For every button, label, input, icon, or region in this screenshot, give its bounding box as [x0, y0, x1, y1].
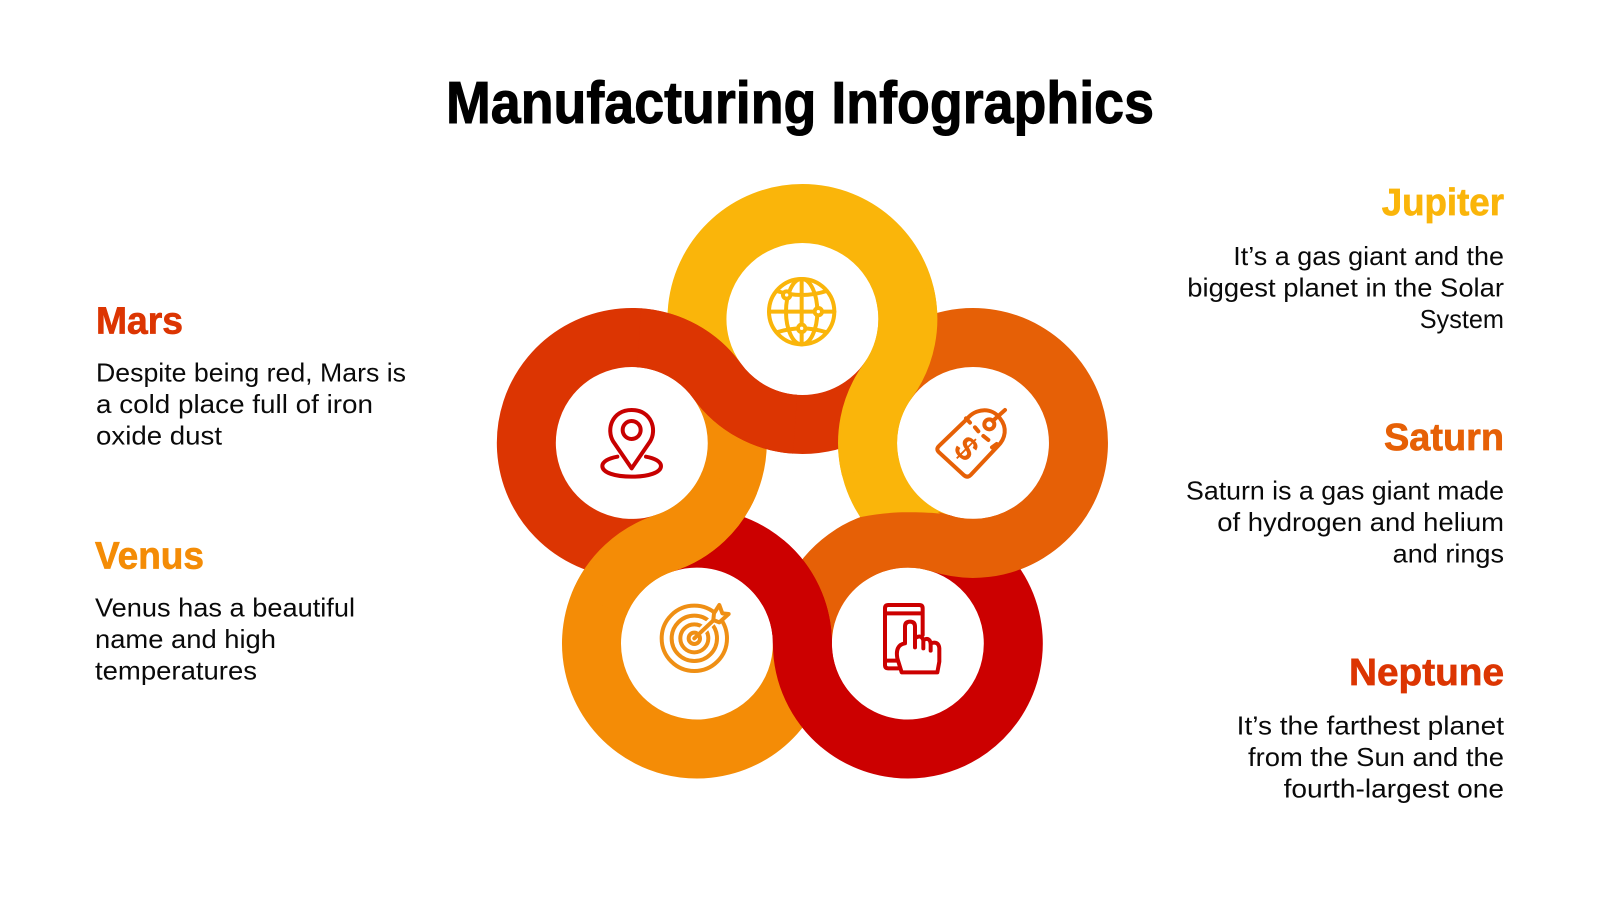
icon: map pin: [602, 410, 661, 477]
body: Venus: [95, 592, 355, 686]
ribbon: red-orange: [499, 279, 888, 613]
text block: Venus: [95, 536, 355, 686]
text block: Jupiter: [1187, 182, 1504, 334]
ribbon crossing: yellow: [868, 293, 908, 469]
ribbon: red: [664, 400, 1055, 810]
body: Venus: name and high: [95, 624, 276, 654]
ribbon: yellow: [697, 214, 940, 543]
body: Jupiter: biggest planet in the Solar: [1187, 272, 1504, 302]
body: Mars: oxide dust: [96, 420, 223, 450]
icon: globe: [769, 279, 834, 344]
ribbon crossing: dark orange: [851, 497, 1030, 589]
text block: Neptune: [1237, 652, 1505, 804]
yellow tail above flattened dark orange edge: [861, 506, 940, 517]
ribbon: dark orange: [727, 310, 1116, 644]
heading: Neptune: Neptune: [1349, 652, 1504, 694]
heading: Mars: Mars: [96, 300, 183, 342]
body: Jupiter: System: [1420, 304, 1504, 334]
heading: Jupiter: Jupiter: [1382, 182, 1504, 224]
body: Saturn: and rings: [1393, 538, 1504, 568]
heading: Saturn: Saturn: [1384, 417, 1504, 459]
body: Neptune: from the Sun and the: [1248, 742, 1504, 772]
ribbon crossing: red-orange: [628, 335, 807, 427]
interlocking ribbon diagram: [499, 214, 1116, 810]
ribbon: orange: [523, 381, 914, 791]
icon: price tag: $: [946, 430, 986, 469]
body: Mars: Despite being red, Mars is: [96, 358, 406, 388]
ribbon crossing: orange: [597, 461, 732, 626]
ribbon crossing: red: [735, 561, 870, 726]
body: Saturn: Saturn is a gas giant made: [1186, 476, 1504, 506]
title: Manufacturing Infographics: [446, 70, 1154, 136]
text block: Mars: [96, 300, 406, 450]
icon: phone with pointing hand: [885, 605, 939, 672]
body: Mars: a cold place full of iron: [96, 389, 373, 419]
body: Neptune: [1237, 710, 1505, 804]
icon: price tag: [937, 410, 1005, 477]
body: Mars: [96, 358, 406, 450]
text block: Saturn: [1186, 417, 1504, 568]
body: Saturn: of hydrogen and helium: [1217, 507, 1504, 537]
body: Venus: Venus has a beautiful: [95, 592, 355, 622]
body: Saturn: [1186, 476, 1504, 568]
body: Neptune: It’s the farthest planet: [1237, 710, 1505, 740]
heading: Venus: Venus: [95, 536, 204, 578]
body: Venus: temperatures: [95, 656, 257, 686]
body: Neptune: fourth-largest one: [1284, 774, 1504, 804]
body: Jupiter: [1187, 241, 1504, 334]
icon: target with arrow: [662, 605, 729, 671]
body: Jupiter: It’s a gas giant and the: [1233, 241, 1504, 271]
